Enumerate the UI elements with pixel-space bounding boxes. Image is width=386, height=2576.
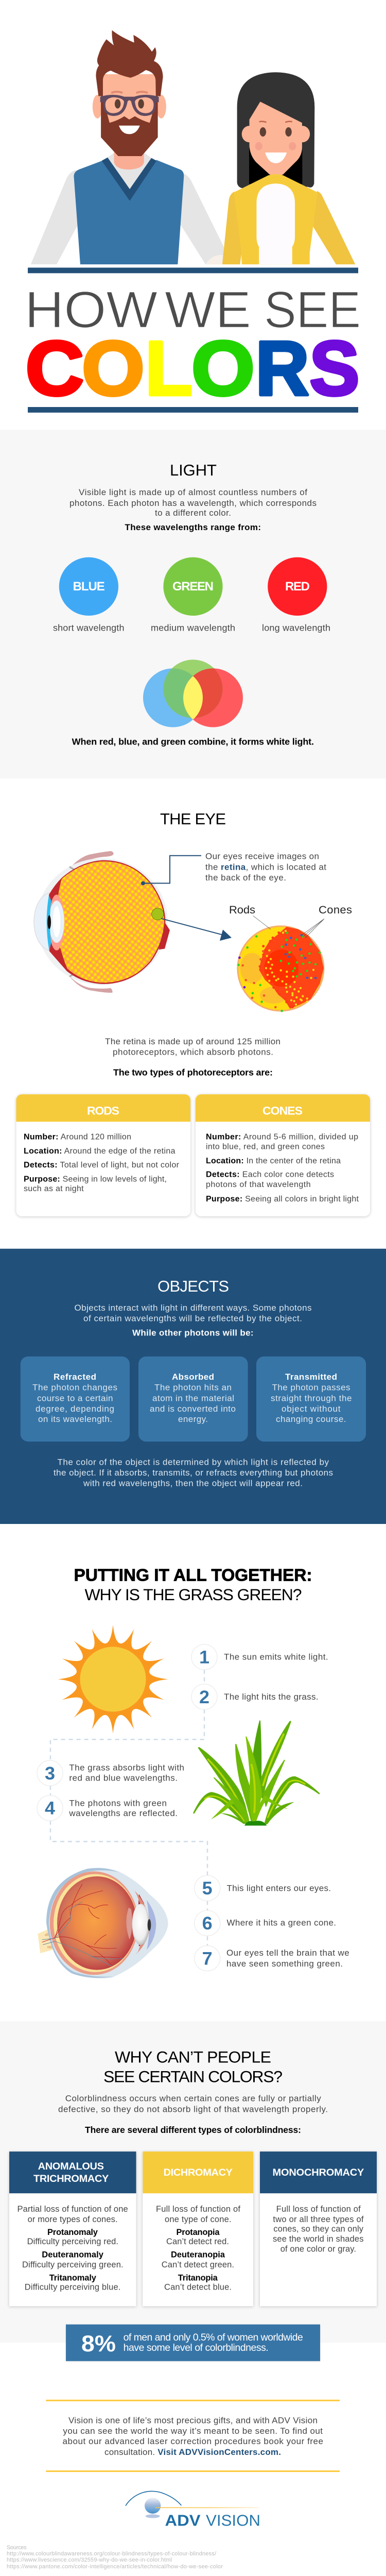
title: how we see: SEE [264,281,361,338]
step 4 [37,1795,178,1821]
title: colors: O [82,326,145,411]
text: closing: about our advanced laser correction procedures book your free [62,2436,323,2446]
rule [46,2470,340,2472]
illustration: man and woman [31,30,355,264]
box: transmitted: straight through the [271,1394,352,1403]
callout text: retina: Our eyes receive images on [205,852,319,861]
card: dichromacy [143,2151,253,2306]
circle: red [262,557,330,633]
circle: blue: short wavelength [53,623,124,633]
title: colors: O [191,326,255,411]
card: dichromacy: Can’t detect green. [162,2260,234,2269]
text: retina photoreceptors [105,1037,280,1057]
panel: light [54,465,330,747]
man [31,30,224,264]
card: anomalous trichromacy: Difficulty perceiving green. [22,2260,124,2269]
heading: putting it all together: PUTTING IT ALL TOGETHER: [74,1566,312,1585]
eye cross-section [34,851,170,993]
text: visible light: Visible light is made up of almost countless numbers of [79,487,307,497]
card: monochromacy: MONOCHROMACY [273,2167,364,2178]
card: cones: into blue, red, and green cones [206,1143,325,1151]
circle: green [151,557,235,633]
card: anomalous trichromacy: Tritanomaly [49,2274,97,2282]
text: object color: The color of the object is determined by which light is reflected by [57,1457,329,1467]
flow connector [50,1670,207,1945]
text: objects intro: Objects interact with light in different ways. Some photons [74,1303,311,1313]
box: absorbed [138,1357,248,1442]
text: colorblindness intro: defective, so they do not absorb light of that wavelength properly. [58,2104,328,2114]
card: rods: Detects: Total level of light, but not color [24,1161,180,1170]
text: objects intro [74,1303,311,1324]
box: absorbed: Absorbed [172,1372,214,1382]
retina magnified [237,916,324,1011]
title: colors [26,326,360,411]
step 2 [191,1684,318,1709]
text: retina photoreceptors: photoreceptors, which absorb photons. [113,1047,273,1057]
box: absorbed: atom in the material [152,1394,234,1403]
banner: 8 percent [66,2325,320,2361]
step 6: Where it hits a green cone. [226,1918,336,1928]
label: cones: Cones [319,903,352,916]
box: transmitted: Transmitted [285,1372,337,1382]
box: refracted: on its wavelength. [38,1414,112,1424]
card: rods: RODS [87,1104,119,1117]
box: transmitted: object without [282,1404,341,1414]
heading: why can't people: WHY CAN’T PEOPLE [115,2048,271,2066]
card: anomalous trichromacy: Difficulty perceiving blue. [25,2283,120,2292]
title: colors: L [145,326,192,411]
venn diagram [143,659,243,727]
card: anomalous trichromacy: TRICHROMACY [33,2173,109,2184]
box: transmitted [256,1357,366,1442]
banner: 8 percent: have some level of colorblindness. [124,2342,269,2353]
arrow: zoom to retina [161,919,232,941]
card: monochromacy: see the world in shades [273,2234,363,2244]
box: refracted [21,1357,130,1442]
title rule bottom [28,407,358,413]
panel: the eye [16,810,370,1216]
step 4: The photons with green [69,1799,167,1808]
step 5: 5 [202,1878,213,1899]
circle: red: long wavelength [262,623,330,633]
sources: https://www.pantone.com/color-intelligence/articles/technical/how-do-we-see-color [7,2564,223,2570]
callout leader: retina [141,856,201,885]
rule [46,2400,340,2401]
caption: white light: When red, blue, and green combine, it forms white light. [72,736,314,747]
card: anomalous trichromacy: Protanomaly [47,2228,98,2237]
subheading: types: There are several different types of colorblindness: [85,2125,301,2135]
card: dichromacy: Full loss of function of [156,2205,240,2214]
heading: why can't people: SEE CERTAIN COLORS? [103,2067,283,2086]
step 7: 7 [202,1948,213,1969]
card: rods [16,1094,190,1216]
card: rods: Purpose: Seeing in low levels of light, [24,1175,167,1183]
box: refracted: Refracted [54,1372,96,1382]
card: dichromacy: DICHROMACY [164,2167,233,2178]
title rule top [28,267,358,273]
step 6 [195,1910,336,1936]
box: transmitted: The photon passes [272,1383,350,1393]
text: closing: you can see the world the way it’s meant to be seen. To find out [63,2426,323,2436]
banner: 8 percent: of men and only 0.5% of women worldwide [124,2332,303,2343]
panel: putting it together [37,1566,349,1978]
heading: the eye: THE EYE [160,810,226,828]
card: cones: Location: In the center of the retina [206,1157,341,1165]
text: object color: the object. If it absorbs, transmits, or refracts everything but photons [54,1468,333,1478]
card: anomalous trichromacy: Deuteranomaly [42,2250,104,2260]
box: absorbed: energy. [178,1414,208,1424]
box: absorbed: The photon hits an [154,1383,232,1393]
text: visible light [69,487,317,518]
card: rods: such as at night [24,1184,84,1193]
box: transmitted: changing course. [276,1414,346,1424]
sources [7,2545,223,2570]
title: how we see: WE [165,281,251,338]
card: cones: Number: Around 5-6 million, divided up [206,1133,358,1142]
logo: adv vision [126,2491,260,2529]
title: how we see: HOW [25,281,158,338]
step 3 [37,1760,184,1786]
text: closing: Vision is one of life’s most precious gifts, and with ADV Vision [68,2416,318,2425]
card: cones: photons of that wavelength [206,1180,311,1189]
card: monochromacy: of one color or gray. [280,2244,356,2253]
callout text: retina [205,852,326,883]
title: colors: R [255,326,309,411]
circle: blue [53,557,124,633]
illustration: anatomical eye [38,1868,168,1978]
step 4: wavelengths are reflected. [68,1808,178,1818]
sources: Sources [7,2545,27,2551]
box: refracted: course to a certain [37,1394,113,1403]
sources: http://www.colourblindawareness.org/colour-blindness/types-of-colour-blindness/ [7,2551,217,2557]
step 3: The grass absorbs light with [69,1763,184,1773]
title: colors: S [309,326,359,411]
subheading: two types: The two types of photoreceptors are: [113,1067,273,1078]
text: visible light: photons. Each photon has a wavelength, which corresponds [69,498,317,508]
step 2: 2 [199,1687,209,1707]
text: closing: consultation. Visit ADVVisionCenters.com. [104,2447,281,2457]
step 7 [195,1945,349,1971]
card: cones: CONES [262,1104,303,1117]
circle: green: medium wavelength [151,623,235,633]
step 6: 6 [202,1913,213,1934]
step 3: red and blue wavelengths. [69,1773,178,1783]
text: colorblindness intro [58,2094,328,2114]
heading: objects: OBJECTS [157,1277,229,1295]
subheading: wavelengths: These wavelengths range from: [125,522,261,532]
box: refracted: The photon changes [32,1383,117,1393]
callout text: retina: the back of the eye. [205,873,286,883]
step 4: 4 [45,1798,55,1819]
card: anomalous trichromacy: Partial loss of function of one [17,2205,128,2214]
step 1 [191,1645,328,1670]
card: anomalous trichromacy: or more types of cones. [28,2215,118,2224]
heading: light: LIGHT [170,461,217,479]
banner: 8 percent: 8% [81,2331,116,2357]
step 5: This light enters our eyes. [226,1884,331,1893]
card: rods: Location: Around the edge of the retina [24,1147,176,1156]
logo: adv vision: ADV [165,2512,201,2529]
callout text: retina: the retina, which is located at [205,862,326,872]
icon: grass [194,1721,319,1826]
card: dichromacy: Can’t detect red. [166,2237,229,2246]
circle: red: RED [285,580,310,594]
heading: why can't people [103,2048,283,2086]
box: refracted: degree, depending [36,1404,114,1414]
logo: adv vision: VISION [206,2512,260,2529]
text: object color [54,1457,333,1488]
text: object color: with red wavelengths, then the object will appear red. [83,1479,303,1488]
label: rods: Rods [229,903,255,916]
card: dichromacy: Deuteranopia [171,2250,225,2260]
text: objects intro: of certain wavelengths will be reflected by the object. [83,1314,302,1324]
circle: green: GREEN [172,580,214,594]
subheading: other photons: While other photons will be: [132,1328,254,1337]
step 5 [195,1875,331,1901]
card: monochromacy: cones, so they can only [273,2225,364,2234]
text: colorblindness intro: Colorblindness occurs when certain cones are fully or partially [65,2094,321,2104]
card: monochromacy: Full loss of function of [276,2205,361,2214]
sources: https://www.livescience.com/32559-why-do-we-see-in-color.html [7,2557,172,2563]
card: monochromacy [260,2151,377,2306]
step 1: The sun emits white light. [224,1652,328,1662]
panel: objects [0,1249,386,1524]
card: cones [196,1094,370,1216]
card: dichromacy: one type of cone. [165,2215,232,2224]
panel: hero [25,30,361,413]
card: dichromacy: Can’t detect blue. [164,2283,232,2292]
circle: blue: BLUE [73,580,105,594]
step 7: have seen something green. [226,1959,343,1969]
card: anomalous trichromacy: Difficulty perceiving red. [27,2237,118,2246]
woman [205,72,355,264]
card: cones: Purpose: Seeing all colors in bright light [206,1195,359,1204]
card: anomalous trichromacy [9,2151,136,2306]
card: rods: Number: Around 120 million [24,1133,131,1142]
card: cones: Detects: Each color cone detects [206,1171,334,1179]
title: colors: C [26,326,84,411]
icon: sun [58,1625,168,1734]
text: closing [62,2416,323,2457]
box: absorbed: and is converted into [150,1404,236,1414]
text: visible light: to a different color. [155,508,231,518]
card: anomalous trichromacy: ANOMALOUS [38,2161,104,2172]
panel: colorblindness [0,2021,386,2343]
step 1: 1 [199,1647,209,1667]
heading: why grass green: WHY IS THE GRASS GREEN? [84,1585,302,1604]
card: dichromacy: Tritanopia [178,2274,218,2282]
card: monochromacy: two or all three types of [273,2215,364,2224]
step 3: 3 [45,1763,55,1784]
text: retina photoreceptors: The retina is made up of around 125 million [105,1037,280,1046]
step 7: Our eyes tell the brain that we [226,1948,349,1958]
card: dichromacy: Protanopia [176,2228,220,2237]
step 2: The light hits the grass. [224,1692,318,1702]
title: how we see [25,281,361,338]
